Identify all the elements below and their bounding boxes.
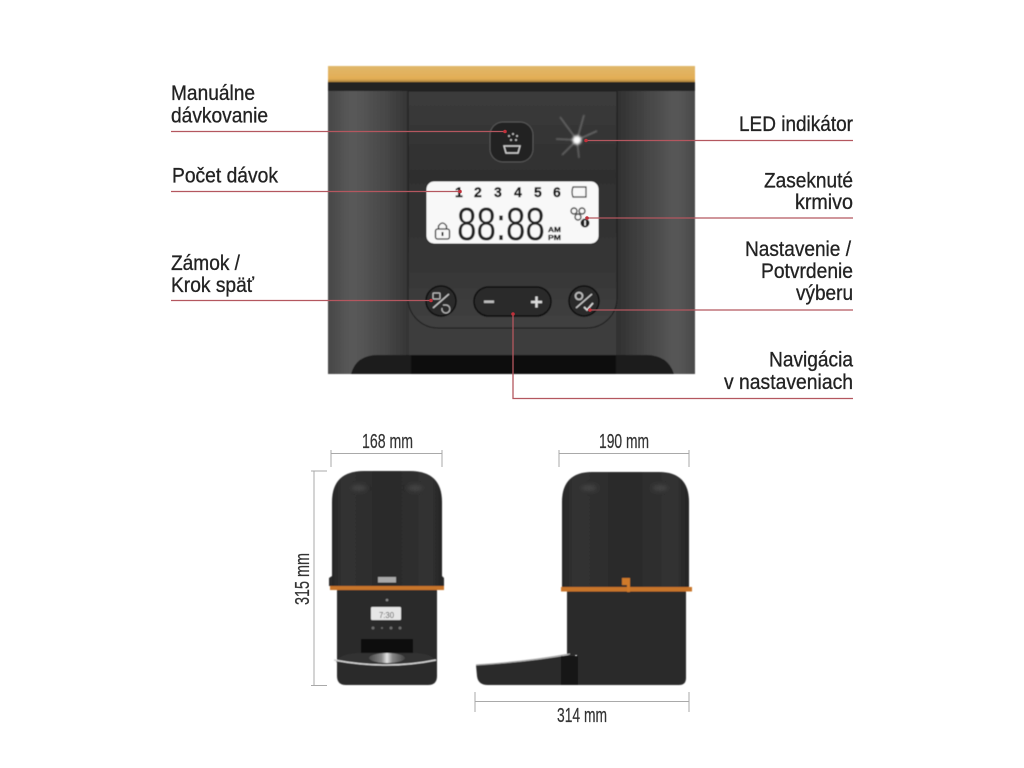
callout: jammed food: krmivo: [795, 191, 853, 214]
callout: jammed food: [585, 170, 853, 220]
mini LED: [386, 599, 388, 601]
body sides: [328, 91, 695, 374]
panel: control panel photo: [328, 66, 695, 374]
manual dosing button: [490, 122, 533, 162]
center panel: [408, 91, 617, 328]
upper tank: [332, 471, 442, 588]
orange band: [329, 576, 444, 590]
callout: lock / back: Zámok /: [171, 252, 240, 275]
dose numbers: 2: [474, 184, 482, 200]
callout: navigation: Navigácia: [769, 348, 853, 372]
dimension: 168 mm: 168 mm: [362, 431, 413, 453]
lower body: [567, 590, 686, 685]
tank highlights: [581, 486, 668, 490]
callout: navigation: [511, 312, 853, 398]
AM PM: PM: [548, 233, 561, 242]
food chute: [361, 639, 413, 654]
logo: [378, 577, 396, 582]
lower body: [337, 588, 437, 685]
callout: navigation: v nastaveniach: [724, 371, 853, 394]
dimension: 315 mm: [292, 471, 327, 686]
callout: settings / confirm: Nastavenie /: [745, 238, 851, 261]
LED star: [556, 115, 597, 158]
battery icon: [572, 187, 586, 197]
mini display: [371, 607, 401, 620]
LCD display: [426, 181, 599, 250]
lock icon: [436, 223, 450, 239]
callout: settings / confirm: [588, 238, 853, 312]
dose numbers: 5: [534, 184, 542, 200]
settings button: [569, 286, 599, 316]
callout: settings / confirm: Potvrdenie: [761, 260, 853, 283]
dimension: 190 mm: 190 mm: [599, 431, 649, 453]
bowl: [334, 653, 436, 665]
minus plus button: [474, 287, 551, 316]
dimension: 314 mm: [475, 692, 689, 727]
dimension: 314 mm: 314 mm: [557, 705, 607, 727]
tray: [476, 654, 578, 685]
AM PM: [548, 225, 561, 242]
side view device: [476, 472, 692, 685]
orange band: [561, 587, 692, 592]
dimension: 168 mm: [331, 431, 442, 467]
dimension: 315 mm: 315 mm: [292, 553, 314, 605]
dose numbers: 4: [514, 184, 522, 200]
callout: dose count: Počet dávok: [172, 164, 278, 188]
callout: LED indicator: LED indikátor: [739, 113, 853, 136]
mini buttons: [372, 626, 402, 630]
jam icon: [571, 208, 590, 228]
callout: settings / confirm: výberu: [796, 282, 853, 305]
callout: jammed food: Zaseknuté: [764, 170, 853, 192]
dose numbers: 3: [494, 184, 502, 200]
callout: dose count: [171, 164, 462, 193]
callout: lock / back: [171, 252, 433, 302]
front view device: [329, 471, 444, 685]
back button: [426, 286, 456, 316]
upper tank: [562, 472, 689, 588]
tray joint shadow: [561, 656, 578, 685]
dose numbers: [455, 184, 561, 200]
wooden lid strip: [328, 66, 695, 83]
callout: manual dosing: dávkovanie: [171, 104, 268, 128]
callout: manual dosing: [171, 82, 507, 133]
callout: lock / back: Krok späť: [171, 274, 255, 297]
callout: LED indicator: [584, 113, 853, 142]
clock digits: 88:88: [457, 198, 545, 250]
orange clip: [622, 578, 630, 592]
AM PM: AM: [548, 225, 561, 234]
dimension: 190 mm: [559, 431, 689, 467]
callout: manual dosing: Manuálne: [171, 82, 255, 105]
dose numbers: 1: [455, 184, 463, 200]
dose numbers: 6: [553, 184, 561, 200]
tank highlights: [351, 486, 423, 490]
mini display: 7:30: [379, 611, 395, 620]
food opening: [351, 355, 674, 374]
